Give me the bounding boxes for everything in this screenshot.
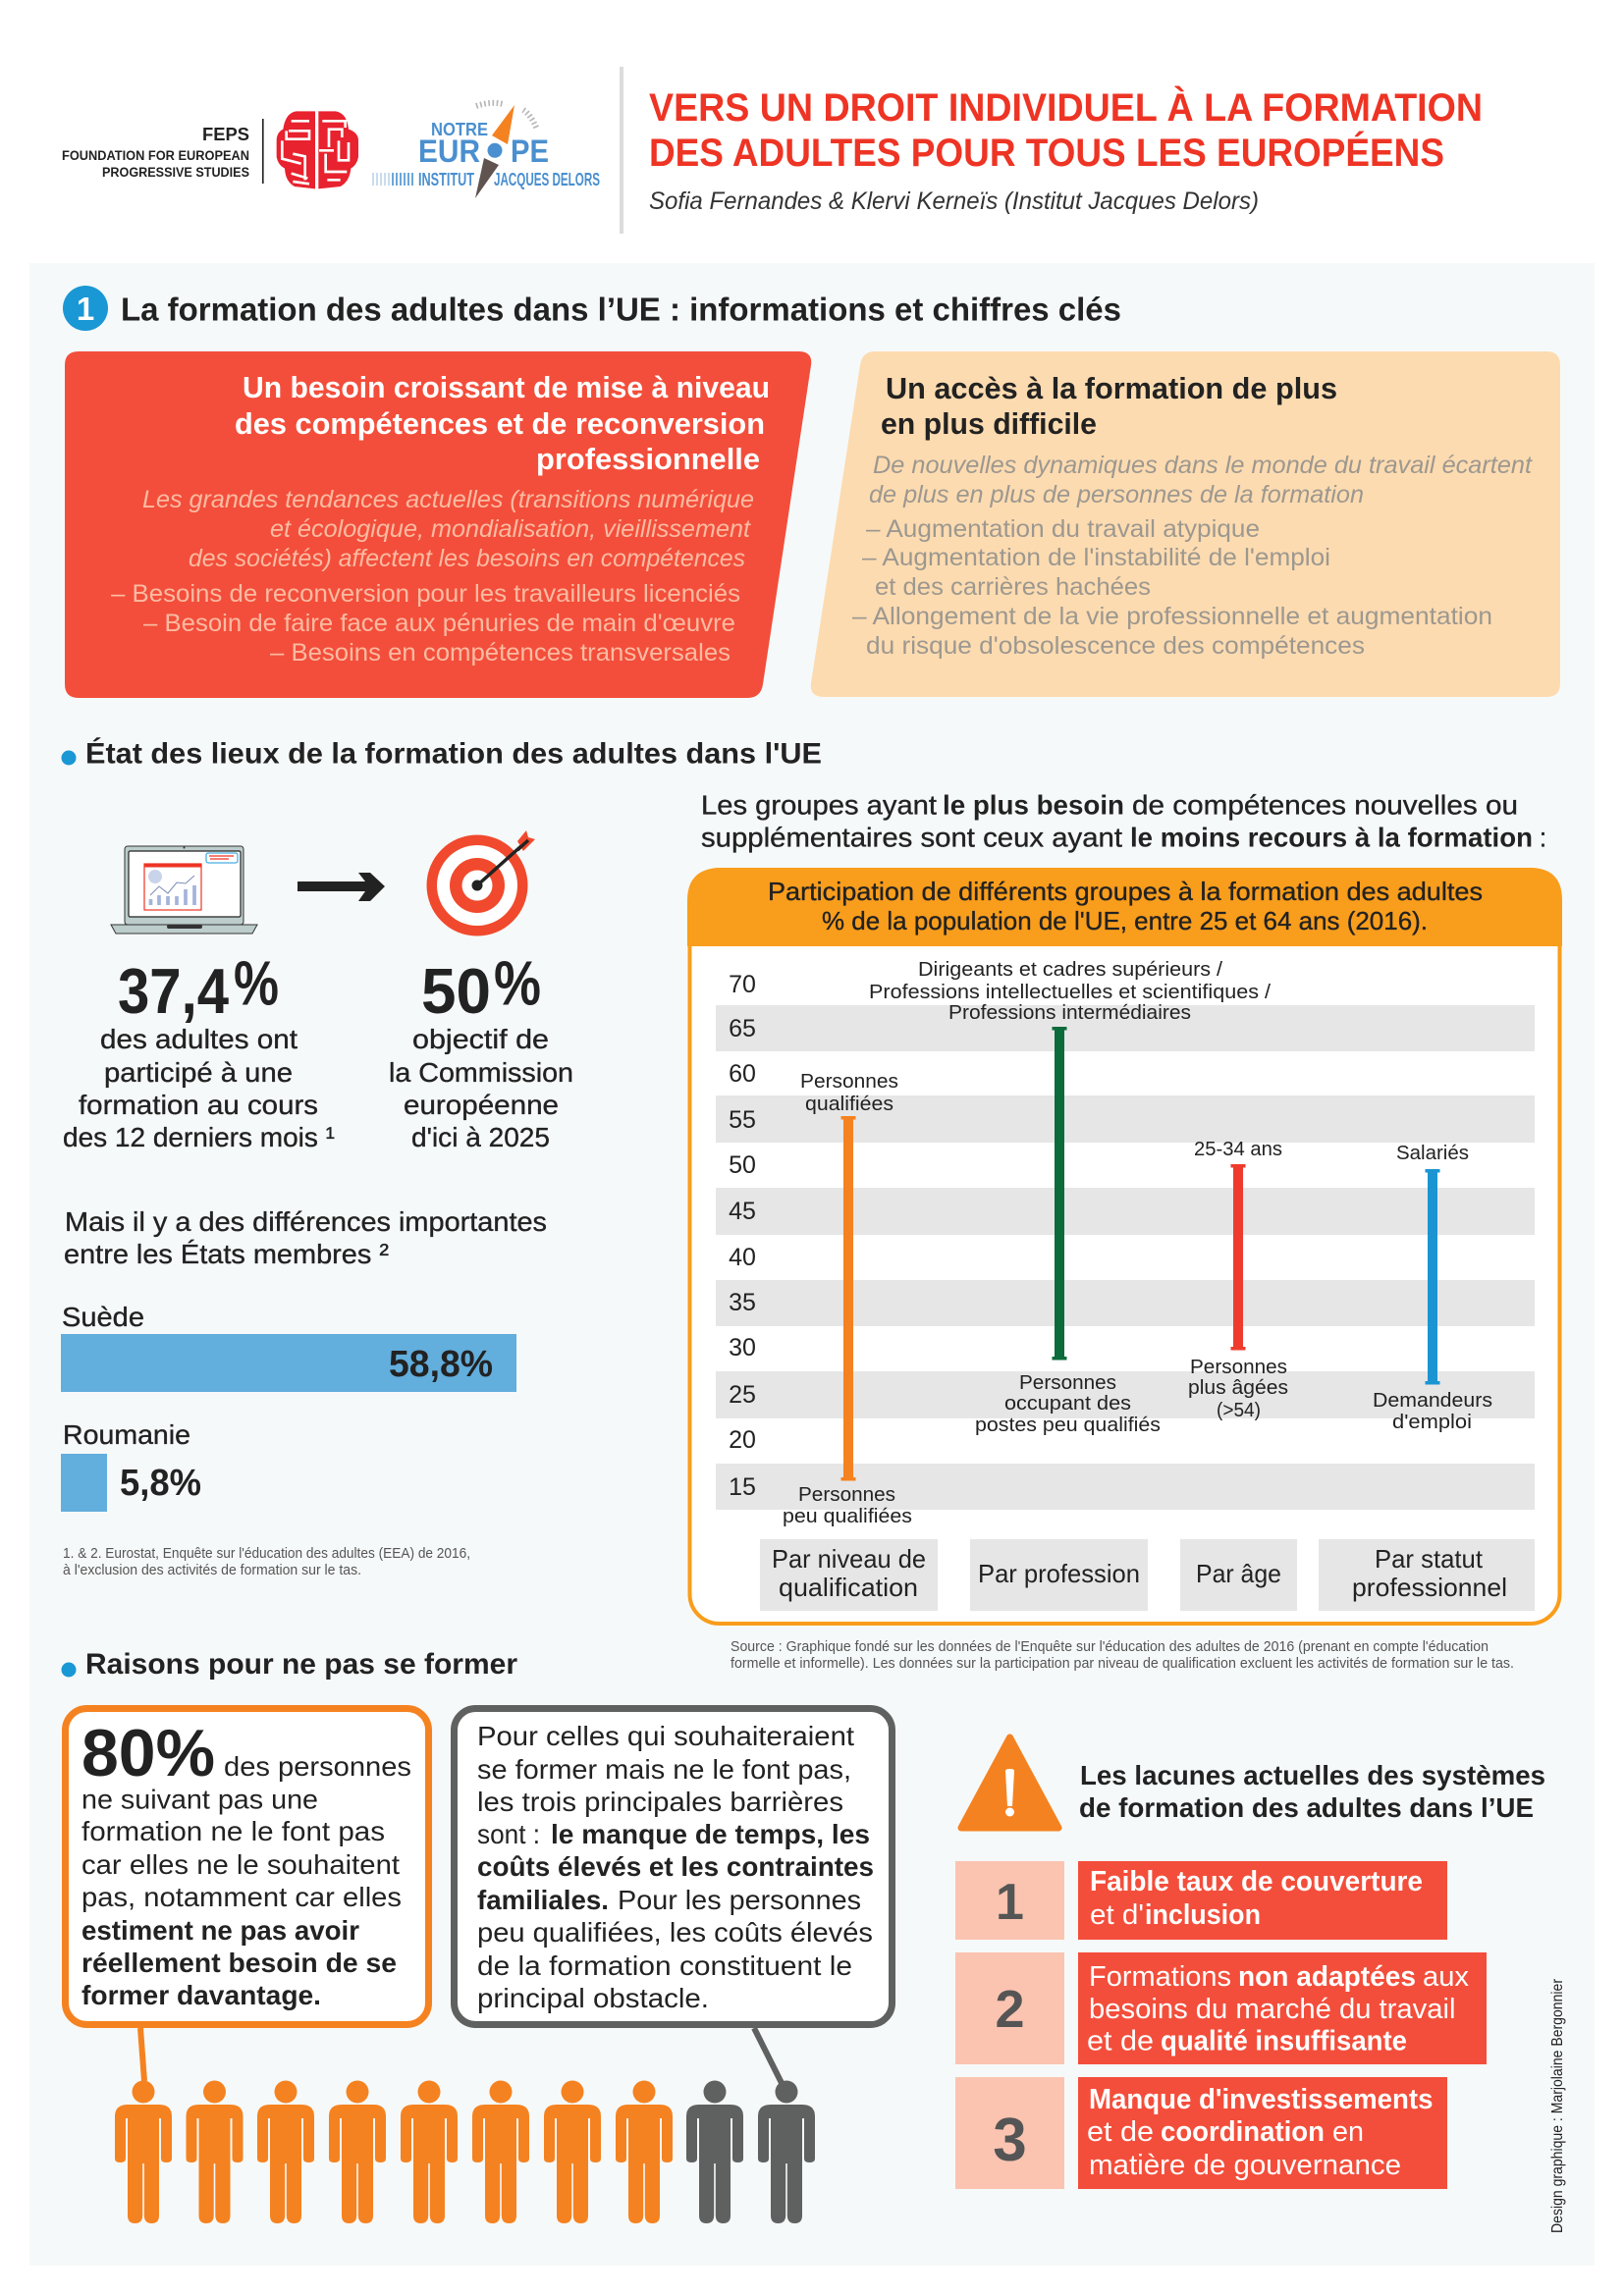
chart header: Participation de différents groupes à la formation des adultes	[768, 877, 1483, 906]
range bar: profession: Personnes	[1019, 1372, 1116, 1394]
callout: 80%: estiment ne pas avoir	[81, 1915, 359, 1946]
text: groupes ayant le plus besoin: Les groupes ayant	[701, 789, 937, 821]
range bar: âge	[1188, 1139, 1288, 1421]
lacune 1	[955, 1861, 1447, 1940]
panel: chart	[687, 868, 1562, 1624]
lacune 2: Formations	[1089, 1961, 1231, 1993]
chart source	[731, 1638, 1514, 1672]
lacune 2: 2	[995, 1980, 1025, 2039]
lacune 3: coordination	[1161, 2116, 1325, 2148]
chart y axis: 70	[729, 971, 756, 998]
lacune 3: et de	[1087, 2116, 1154, 2148]
category: par statut	[1319, 1539, 1535, 1611]
range bar: profession: Professions intermédiaires	[948, 1002, 1191, 1024]
icon: ten people	[115, 2081, 815, 2223]
callout: 80%: car elles ne le souhaitent	[81, 1849, 400, 1880]
range bar: âge: plus âgées	[1188, 1377, 1288, 1399]
logo: FEPS: FOUNDATION FOR EUROPEAN	[62, 148, 249, 163]
text: différences entre États membres: Mais il y a des différences importantes	[65, 1206, 547, 1237]
panel: besoin croissant	[65, 351, 811, 698]
callout: 80%: réellement besoin de se	[81, 1948, 397, 1978]
category: par âge	[1180, 1539, 1297, 1611]
stat: 50%: 50	[421, 955, 491, 1027]
text: différences entre États membres: entre les États membres ²	[64, 1239, 389, 1269]
callout: barrières: se former mais ne le font pas,	[477, 1754, 851, 1785]
icon: warning triangle	[961, 1737, 1058, 1828]
heading: lacunes: Les lacunes actuelles des systèmes	[1080, 1760, 1545, 1790]
lacune 2: et de	[1087, 2026, 1154, 2057]
range bar: qualification: Personnes	[800, 1071, 898, 1093]
stat: 37,4%: %	[234, 948, 279, 1019]
connector: grey callout	[754, 2028, 782, 2083]
icon: target	[426, 830, 535, 936]
panel: besoin croissant: Les grandes tendances actuelles (transitions numérique	[142, 486, 754, 513]
logo: Notre Europe: PE	[511, 133, 549, 169]
panel: besoin croissant: des compétences et de reconversion	[235, 406, 765, 441]
callout: 80%: pas, notamment car elles	[81, 1882, 402, 1912]
chart y axis: 30	[729, 1334, 756, 1362]
bar: Suède: 58,8%	[389, 1344, 493, 1385]
chart y axis: 25	[729, 1381, 756, 1409]
category: par niveau	[760, 1539, 938, 1611]
range bar: statut: Demandeurs	[1373, 1390, 1492, 1412]
panel: besoin croissant: – Besoin de faire face aux pénuries de main d'œuvre	[143, 610, 735, 637]
callout: barrières: sont :	[477, 1819, 540, 1849]
panel: besoin croissant: Un besoin croissant de mise à niveau	[243, 370, 770, 404]
callout: 80%: formation ne le font pas	[81, 1816, 385, 1846]
chart y axis: 15	[729, 1473, 756, 1501]
footnote: à l'exclusion des activités de formation sur le tas.	[63, 1562, 361, 1578]
callout: 80%: 80%	[81, 1716, 215, 1790]
chart y axis	[729, 971, 756, 1501]
callout: barrières: coûts élevés et les contraintes	[477, 1851, 874, 1882]
category: par niveau: qualification	[779, 1573, 918, 1602]
panel: accès difficile: en plus difficile	[881, 406, 1097, 441]
callout: barrières: peu qualifiées, les coûts élevés	[477, 1917, 873, 1948]
text: groupes ayant le plus besoin: supplémentaires sont ceux ayant	[701, 823, 1122, 852]
lacune 1: Faible taux de couverture	[1090, 1866, 1423, 1897]
text: groupes ayant le plus besoin: le plus besoin	[943, 789, 1124, 821]
callout: 80%	[65, 1708, 428, 2024]
logo: Notre Europe: NOTRE	[431, 120, 488, 139]
lacune 3: en	[1332, 2116, 1364, 2148]
range bar: statut: Salariés	[1396, 1143, 1469, 1164]
stat: 37,4%: 37,4	[118, 955, 229, 1027]
text: groupes ayant le plus besoin: le moins recours à la formation	[1130, 823, 1533, 852]
heading: lacunes	[1079, 1760, 1545, 1823]
range bar: qualification: peu qualifiées	[783, 1506, 912, 1527]
lacune 3	[955, 2077, 1447, 2189]
range bar: statut: d'emploi	[1392, 1412, 1472, 1433]
range bar: profession: Dirigeants et cadres supérieurs /	[918, 959, 1222, 981]
stat: 50%: la Commission	[389, 1057, 573, 1088]
chart y axis: 65	[729, 1015, 756, 1042]
callout: 80%: des personnes	[224, 1751, 411, 1782]
callout: barrières: Pour les personnes	[618, 1885, 861, 1915]
panel: accès difficile	[811, 351, 1560, 697]
callout: 80%: former davantage.	[81, 1980, 321, 2010]
range bar: profession: occupant des	[1004, 1393, 1131, 1415]
logo: FEPS	[62, 111, 358, 188]
chart y axis: 50	[729, 1151, 756, 1179]
text: groupes ayant le plus besoin: :	[1540, 823, 1546, 852]
category: par profession	[970, 1539, 1148, 1611]
logo: FEPS: FEPS	[202, 125, 249, 144]
range bar: profession: postes peu qualifiés	[975, 1415, 1161, 1436]
stat: 37,4%: formation au cours	[79, 1090, 318, 1120]
callout: barrières: principal obstacle.	[477, 1983, 709, 2013]
footnote	[63, 1545, 470, 1578]
footnote: 1. & 2. Eurostat, Enquête sur l'éducation des adultes (EEA) de 2016,	[63, 1545, 470, 1562]
bar: Roumanie: Roumanie	[63, 1419, 190, 1450]
lacune 3: 3	[993, 2107, 1027, 2174]
lacune 1: 1	[996, 1874, 1024, 1931]
section heading 1: 1	[77, 291, 94, 327]
chart y axis: 35	[729, 1289, 756, 1316]
heading: raisons: Raisons pour ne pas se former	[85, 1648, 517, 1681]
bar: Suède	[61, 1302, 516, 1392]
callout: barrières	[454, 1708, 892, 2024]
panel: accès difficile: – Augmentation de l'instabilité de l'emploi	[862, 544, 1330, 571]
range bar: profession	[869, 959, 1271, 1436]
category: par statut: Par statut	[1375, 1544, 1484, 1574]
range bar: profession: Professions intellectuelles et scientifiques /	[869, 982, 1271, 1003]
title	[649, 85, 1483, 175]
range bar: âge: (>54)	[1217, 1400, 1261, 1421]
panel: accès difficile: du risque d'obsolescence des compétences	[866, 632, 1365, 660]
stat: 37,4%: participé à une	[104, 1057, 293, 1088]
chart y axis: 45	[729, 1198, 756, 1225]
range bar: qualification: qualifiées	[805, 1094, 893, 1115]
panel: besoin croissant: – Besoins en compétences transversales	[270, 639, 731, 667]
lacune 2	[955, 1952, 1487, 2064]
panel: accès difficile: de plus en plus de personnes de la formation	[869, 481, 1364, 508]
stat: 50%: %	[494, 948, 541, 1019]
stat: 50%: européenne	[404, 1090, 559, 1120]
chart source: formelle et informelle). Les données sur la participation par niveau de qualification excluent les activités de formation sur le tas.	[731, 1655, 1514, 1672]
callout: 80%: ne suivant pas une	[81, 1785, 318, 1814]
lacune 3: matière de gouvernance	[1089, 2150, 1401, 2181]
range bar: statut	[1373, 1143, 1492, 1433]
range bar: qualification	[783, 1071, 912, 1527]
heading: état des lieux: État des lieux de la formation des adultes dans l'UE	[85, 736, 822, 770]
panel: accès difficile: – Allongement de la vie professionnelle et augmentation	[852, 603, 1492, 630]
range bar: âge: Personnes	[1190, 1357, 1287, 1378]
panel: accès difficile: Un accès à la formation de plus	[886, 371, 1337, 405]
stat: 37,4%: des adultes ont	[100, 1024, 298, 1054]
text: groupes ayant le plus besoin	[701, 789, 1546, 852]
title: DES ADULTES POUR TOUS LES EUROPÉENS	[649, 131, 1444, 175]
lacune 2: qualité insuffisante	[1161, 2026, 1407, 2057]
panel: accès difficile: – Augmentation du travail atypique	[866, 515, 1260, 543]
callout: barrières: Pour celles qui souhaiteraient	[477, 1721, 854, 1751]
stat: 37,4%	[63, 948, 335, 1152]
arrow: laptop to target	[298, 873, 385, 901]
callout: barrières: les trois principales barrières	[477, 1787, 843, 1817]
panel: besoin croissant: et écologique, mondialisation, vieillissement	[270, 515, 751, 543]
chart header: % de la population de l'UE, entre 25 et 64 ans (2016).	[822, 906, 1428, 935]
panel: accès difficile: De nouvelles dynamiques dans le monde du travail écartent	[873, 452, 1533, 479]
range bar: qualification: Personnes	[798, 1484, 895, 1506]
logo: Notre Europe: INSTITUT	[418, 170, 474, 189]
text: groupes ayant le plus besoin: de compétences nouvelles ou	[1132, 789, 1518, 821]
logo: FEPS: PROGRESSIVE STUDIES	[102, 165, 249, 180]
callout: barrières: de la formation constituent le	[477, 1950, 852, 1981]
range bar: âge: 25-34 ans	[1194, 1139, 1282, 1160]
panel: besoin croissant: professionnelle	[536, 442, 760, 476]
credit: design graphique: Design graphique : Marjolaine Bergonnier	[1549, 1978, 1566, 2233]
category: par niveau: Par niveau de	[772, 1544, 926, 1574]
section heading 1: La formation des adultes dans l’UE : informations et chiffres clés	[121, 291, 1121, 328]
chart source: Source : Graphique fondé sur les données de l'Enquête sur l'éducation des adultes de 2016 (prenant en compte l'éducation	[731, 1638, 1489, 1655]
logo: Notre Europe: EUR	[418, 133, 480, 169]
callout: barrières: familiales.	[477, 1885, 609, 1915]
category: par âge: Par âge	[1196, 1559, 1281, 1588]
bar: Suède: Suède	[62, 1302, 144, 1332]
category: par profession: Par profession	[978, 1559, 1140, 1588]
lacune 3: Manque d'investissements	[1089, 2084, 1434, 2115]
lacune 1: inclusion	[1145, 1899, 1261, 1931]
lacune 1: et d'	[1090, 1899, 1144, 1931]
chart y axis: 60	[729, 1060, 756, 1088]
logo: Notre Europe: JACQUES DELORS	[494, 170, 600, 189]
chart bands	[716, 1005, 1535, 1510]
lacune 2: aux	[1423, 1961, 1469, 1993]
chart y axis: 20	[729, 1426, 756, 1454]
heading: lacunes: de formation des adultes dans l’UE	[1079, 1792, 1534, 1823]
lacune 2: besoins du marché du travail	[1089, 1994, 1455, 2025]
stat: 50%: objectif de	[412, 1024, 549, 1054]
stat: 37,4%: des 12 derniers mois ¹	[63, 1122, 335, 1152]
callout: barrières: le manque de temps, les	[551, 1819, 870, 1849]
chart header	[687, 868, 1562, 946]
category: par statut: professionnel	[1352, 1573, 1507, 1602]
stat: 50%: d'ici à 2025	[411, 1122, 550, 1152]
lacune 2: non adaptées	[1238, 1961, 1416, 1993]
bar: Roumanie	[61, 1419, 201, 1512]
authors: Sofia Fernandes & Klervi Kerneïs (Institut Jacques Delors)	[649, 187, 1259, 215]
title: VERS UN DROIT INDIVIDUEL À LA FORMATION	[649, 85, 1483, 130]
logo: Notre Europe	[373, 103, 600, 198]
icon: laptop	[111, 846, 257, 934]
chart y axis: 55	[729, 1106, 756, 1134]
connector: orange callout	[140, 2028, 144, 2081]
panel: accès difficile: et des carrières hachées	[875, 573, 1151, 601]
panel: besoin croissant: – Besoins de reconversion pour les travailleurs licenciés	[111, 580, 740, 608]
bar: Roumanie: 5,8%	[120, 1463, 201, 1504]
panel: besoin croissant: des sociétés) affectent les besoins en compétences	[189, 545, 745, 572]
chart y axis: 40	[729, 1244, 756, 1271]
text: différences entre États membres	[64, 1206, 547, 1269]
stat: 50%	[389, 948, 573, 1152]
